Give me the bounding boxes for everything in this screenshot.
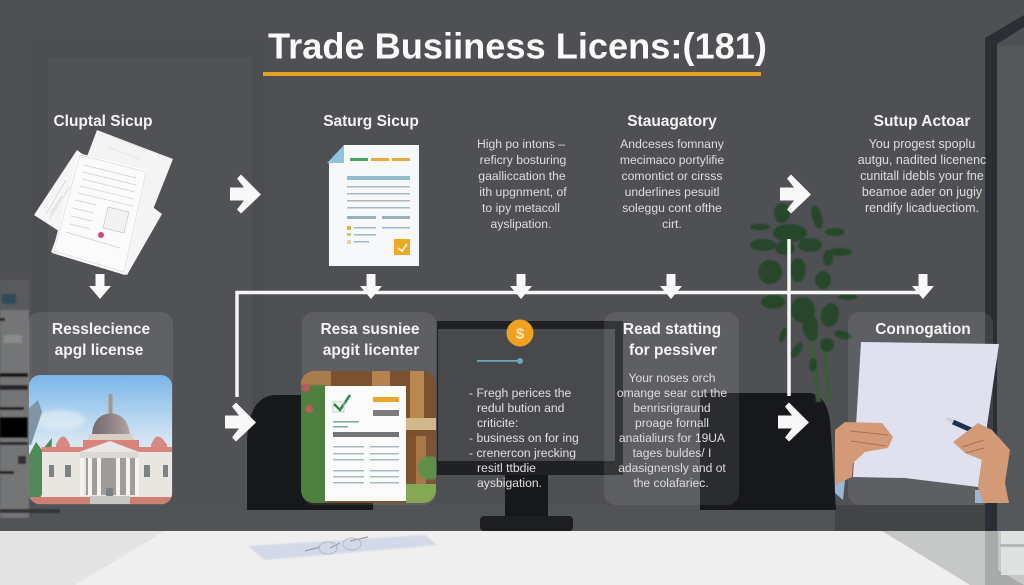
body text: rendify licaduectiom. (865, 201, 979, 215)
arrow: right 1 (230, 174, 261, 214)
arrow: down 2 (360, 274, 382, 299)
mini connector (477, 358, 523, 364)
icon: stack of documents (34, 130, 173, 275)
arrow: right 2 (780, 174, 811, 214)
body text: Your noses orch (629, 371, 715, 385)
body text: anatialiurs for 19UA (619, 431, 726, 445)
heading: Resa susniee (320, 321, 420, 338)
heading: Connogation (875, 321, 971, 338)
body text: omange sear cut the (617, 386, 727, 400)
body text (469, 386, 579, 490)
plant (750, 203, 858, 402)
body text: beamoe ader on jugiy (862, 185, 983, 199)
title: Trade Busiiness Licens:(181) (268, 26, 767, 66)
window frame (985, 15, 1024, 531)
step: Stauagatory (620, 113, 725, 231)
panel: Resslecience (29, 321, 172, 504)
door on wall (32, 40, 265, 505)
body text: adasignensly and ot (618, 461, 726, 475)
body text: benrisrigraund (633, 401, 711, 415)
icon: dollar coin (506, 320, 534, 346)
body text: cirt. (662, 217, 682, 231)
heading: Cluptal Sicup (53, 113, 153, 130)
body text (858, 137, 986, 215)
monitor (437, 321, 623, 531)
step: Sutup Actoar (858, 113, 986, 215)
body text (617, 371, 727, 490)
connector lines (237, 239, 925, 397)
heading: Resslecience (52, 321, 150, 338)
heading: Read statting (623, 321, 721, 338)
body text: proage fornall (635, 416, 709, 430)
step: Cluptal Sicup (34, 113, 173, 275)
body text: underlines pesuitl (625, 185, 719, 199)
body text: autgu, nadited licenenc (858, 153, 986, 167)
clipboard with glasses (248, 535, 437, 560)
title underline (263, 72, 761, 76)
text block: High po intons: to ipy metacoll (482, 201, 560, 215)
arrow: down 4 (660, 274, 682, 299)
text block: High po intons: ayslipation. (491, 217, 551, 231)
body text: Andceses fomnany (620, 137, 725, 151)
heading line 2: apgl license (55, 342, 144, 359)
body text: the colafariec. (633, 476, 709, 490)
text block: High po intons: gaalliccation the (478, 169, 566, 183)
arrow: right 3 (225, 402, 256, 442)
text block: High po intons (477, 137, 567, 231)
chairs (247, 393, 836, 510)
body text: criticite: (477, 416, 518, 430)
office shelf (0, 280, 60, 518)
arrow: down 1 (89, 274, 111, 299)
arrow: right 4 (778, 402, 809, 442)
image: government building (29, 375, 172, 504)
heading: Sutup Actoar (874, 113, 970, 130)
image: approved document on building (301, 371, 442, 503)
body text: You progest spoplu (869, 137, 975, 151)
heading: Saturg Sicup (323, 113, 419, 130)
icon: dollar coin: $ (516, 326, 525, 342)
panel: Read statting (617, 321, 727, 490)
body text: tages buldes/ I (633, 446, 711, 460)
body text: aysbigation. (477, 476, 542, 490)
text block: High po intons: ith upgnment, of (479, 185, 567, 199)
panel: monitor content (469, 320, 579, 490)
body text: - business on for ing (469, 431, 579, 445)
text block: High po intons: High po intons – (477, 137, 565, 151)
arrow: down 5 (912, 274, 934, 299)
heading line 2: for pessiver (629, 342, 717, 359)
heading: Stauagatory (627, 113, 717, 130)
body text (620, 137, 725, 231)
image: hands holding paper and pen (835, 342, 1010, 503)
body text: redul bution and (477, 401, 564, 415)
body text: resitl ttbdie (477, 461, 536, 475)
step: Saturg Sicup (323, 113, 419, 266)
body text: mecimaco portylifie (620, 153, 724, 167)
panel backgrounds (28, 312, 993, 505)
arrow: down 3 (510, 274, 532, 299)
body text: - crenercon jrecking (469, 446, 576, 460)
body text: - Fregh perices the (469, 386, 572, 400)
body text: soleggu cont ofthe (622, 201, 722, 215)
body text: cunitall idebls your fne (860, 169, 984, 183)
panel: Connogation (835, 321, 1010, 503)
body text: comontict or cirsss (622, 169, 722, 183)
icon: form document (327, 145, 419, 266)
panel: Resa susniee (301, 321, 442, 503)
white desk (0, 531, 1024, 585)
text block: High po intons: reficry bosturing (480, 153, 566, 167)
heading line 2: apgit licenter (323, 342, 419, 359)
